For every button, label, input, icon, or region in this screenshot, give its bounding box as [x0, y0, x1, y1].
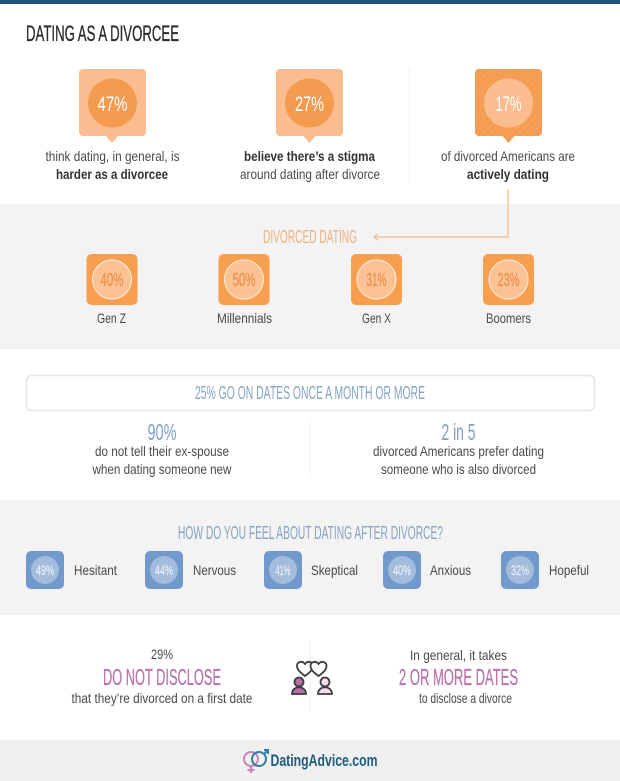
- top bar: [0, 0, 620, 4]
- generation: Gen Z: 40%: [100, 270, 124, 290]
- feeling: Hopeful: 32%: [511, 562, 529, 578]
- stat: 2 in 5: divorced Americans prefer dating: [373, 443, 544, 459]
- title: DATING AS A DIVORCEE: [26, 21, 179, 46]
- stat: 2 or more dates: [399, 647, 518, 706]
- arrow to divorced dating: [374, 189, 508, 240]
- stat card: 27%: around dating after divorce: [240, 166, 380, 182]
- stat: do not disclose: [72, 646, 253, 706]
- logo: DatingAdvice.com: [244, 750, 378, 773]
- feeling: Anxious: Anxious: [430, 562, 471, 578]
- stat card: 47%: [46, 69, 180, 182]
- stat card: 17%: actively dating: [467, 166, 549, 182]
- callout: 25% go on dates: [26, 376, 594, 410]
- feeling: Anxious: 40%: [393, 562, 411, 578]
- feeling: Anxious: [383, 551, 471, 589]
- generation: Gen Z: [86, 254, 138, 326]
- icon: couple with hearts: [292, 662, 332, 694]
- feeling: Hesitant: 49%: [36, 562, 54, 578]
- feeling: Nervous: Nervous: [193, 562, 236, 578]
- heading: divorced dating: DIVORCED DATING: [263, 227, 357, 247]
- stat: 2 in 5: [373, 419, 544, 477]
- generation: Millennials: 50%: [232, 270, 256, 290]
- callout: 25% go on dates: 25% GO ON DATES ONCE A MONTH OR MORE: [195, 383, 425, 403]
- generation: Millennials: [217, 254, 272, 326]
- stat card: 47%: 47%: [98, 93, 128, 116]
- generation: Gen X: [351, 254, 402, 326]
- feeling: Hopeful: [501, 551, 589, 589]
- stat: 2 or more dates: 2 OR MORE DATES: [399, 664, 518, 690]
- feeling: Hopeful: Hopeful: [549, 562, 589, 578]
- generation: Boomers: 23%: [498, 270, 520, 290]
- generation: Gen X: Gen X: [362, 310, 391, 326]
- stat: do not disclose: that they’re divorced on a first date: [72, 690, 253, 706]
- stat card: 47%: think dating, in general, is: [46, 148, 180, 164]
- feeling: Skeptical: 41%: [276, 562, 290, 578]
- stat: 2 in 5: someone who is also divorced: [381, 461, 536, 477]
- stat: 2 or more dates: In general, it takes: [410, 647, 507, 663]
- feeling: Hesitant: [26, 551, 117, 589]
- logo: DatingAdvice.com: DatingAdvice.com: [270, 751, 378, 770]
- stat: 2 or more dates: to disclose a divorce: [419, 690, 512, 706]
- stat: 90%: when dating someone new: [92, 461, 232, 477]
- stat card: 27%: [240, 69, 380, 182]
- stat: do not disclose: 29%: [151, 646, 173, 662]
- stat: 2 in 5: 2 in 5: [442, 419, 476, 445]
- stat card: 17%: of divorced Americans are: [441, 148, 575, 164]
- stat: 90%: 90%: [148, 419, 176, 445]
- stat card: 47%: harder as a divorcee: [56, 166, 168, 182]
- stat card: 27%: 27%: [295, 93, 324, 116]
- generation: Millennials: Millennials: [217, 310, 272, 326]
- feeling: Nervous: [145, 551, 236, 589]
- generation: Boomers: [483, 254, 534, 326]
- stat: 90%: do not tell their ex-spouse: [95, 443, 229, 459]
- feeling: Hesitant: Hesitant: [74, 562, 117, 578]
- stat: do not disclose: DO NOT DISCLOSE: [103, 664, 221, 690]
- stat: 90%: [92, 419, 232, 477]
- feeling: Nervous: 44%: [155, 562, 173, 578]
- generation: Boomers: Boomers: [486, 310, 531, 326]
- generation: Gen X: 31%: [366, 270, 386, 290]
- stat card: 27%: believe there’s a stigma: [244, 148, 375, 164]
- stat card: 17%: 17%: [496, 93, 522, 116]
- generation: Gen Z: Gen Z: [97, 310, 126, 326]
- feeling: Skeptical: [264, 551, 358, 589]
- stat card: 17%: [441, 69, 575, 182]
- feeling: Skeptical: Skeptical: [311, 562, 358, 578]
